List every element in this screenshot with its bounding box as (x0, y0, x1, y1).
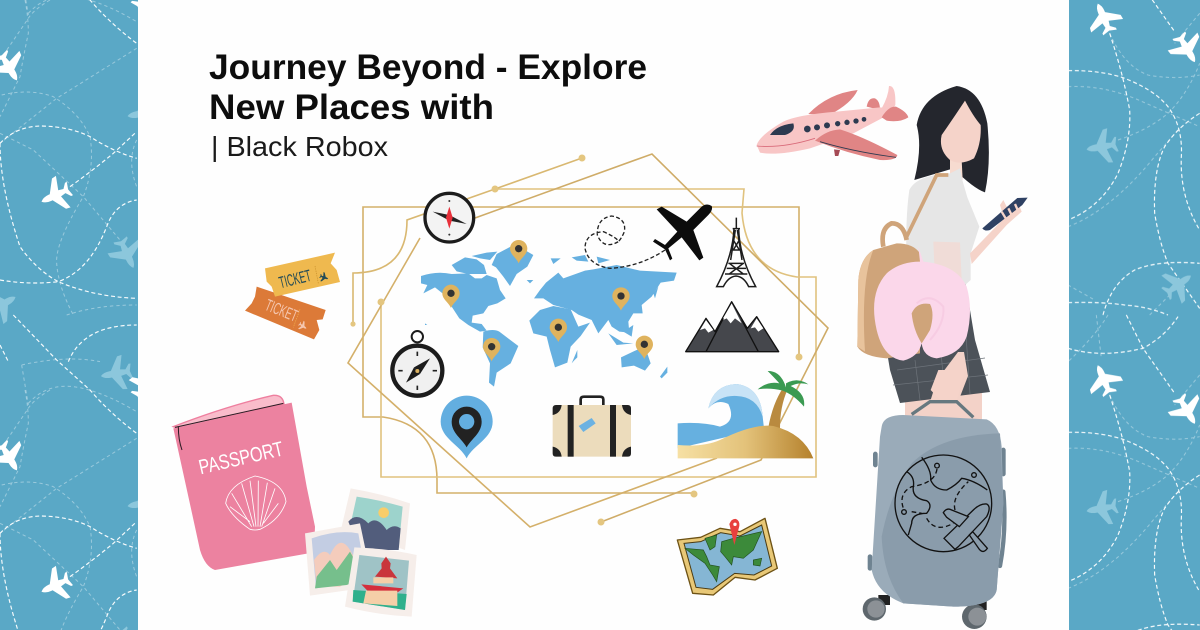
shell (872, 415, 1003, 607)
shell emblem (226, 476, 286, 530)
neck (950, 158, 963, 180)
heading line 1: Journey Beyond - Explore (209, 48, 647, 87)
rolling suitcase (863, 370, 1004, 629)
icon: beach with wave and palm (678, 371, 813, 458)
hair (914, 86, 989, 192)
passport label: PASSPORT (197, 437, 286, 479)
phone (982, 198, 1028, 231)
subheading: | Black Robox (211, 131, 388, 162)
title block (209, 48, 647, 162)
shirt (906, 168, 979, 287)
icon: pocket compass (392, 331, 442, 396)
photo: snowy peaks (305, 523, 373, 596)
icon: black airplane (653, 204, 712, 260)
icon: snowy mountains (686, 302, 779, 352)
neck pillow (874, 247, 970, 361)
bag strap (907, 175, 948, 237)
dashed flight path (585, 216, 665, 268)
face (941, 101, 981, 163)
photo stack (305, 488, 417, 617)
photo: pagoda (345, 547, 417, 617)
world map (421, 244, 677, 387)
central travel scene (392, 193, 813, 458)
illustration: woman traveller (857, 86, 1028, 629)
heading line 2: New Places with (209, 88, 494, 127)
icon: pink airplane (757, 86, 908, 160)
photo: landscape with sun (342, 488, 410, 550)
icon: suitcase (553, 397, 631, 457)
icon: golden tickets (245, 253, 340, 339)
icon: location marker (441, 396, 493, 458)
side clips and handle (870, 450, 1004, 568)
hand on handle (931, 370, 965, 402)
legs and skirt (888, 280, 990, 420)
map location pins (442, 240, 653, 361)
backpack (857, 223, 920, 358)
yellow ticket: TICKET (277, 266, 313, 292)
icon: folded world map (677, 518, 777, 595)
panel: left blue flight-route pattern (0, 0, 138, 630)
globe sticker (895, 455, 992, 552)
forearm and hand (970, 200, 1022, 264)
icon: Eiffel tower (717, 218, 756, 287)
icon: pink passport (173, 395, 315, 570)
gold frame lines (348, 154, 828, 527)
orange ticket: TICKET (263, 295, 301, 326)
panel: right blue flight-route pattern (1069, 0, 1200, 630)
wheels (863, 595, 987, 629)
icon: top compass (425, 193, 474, 242)
